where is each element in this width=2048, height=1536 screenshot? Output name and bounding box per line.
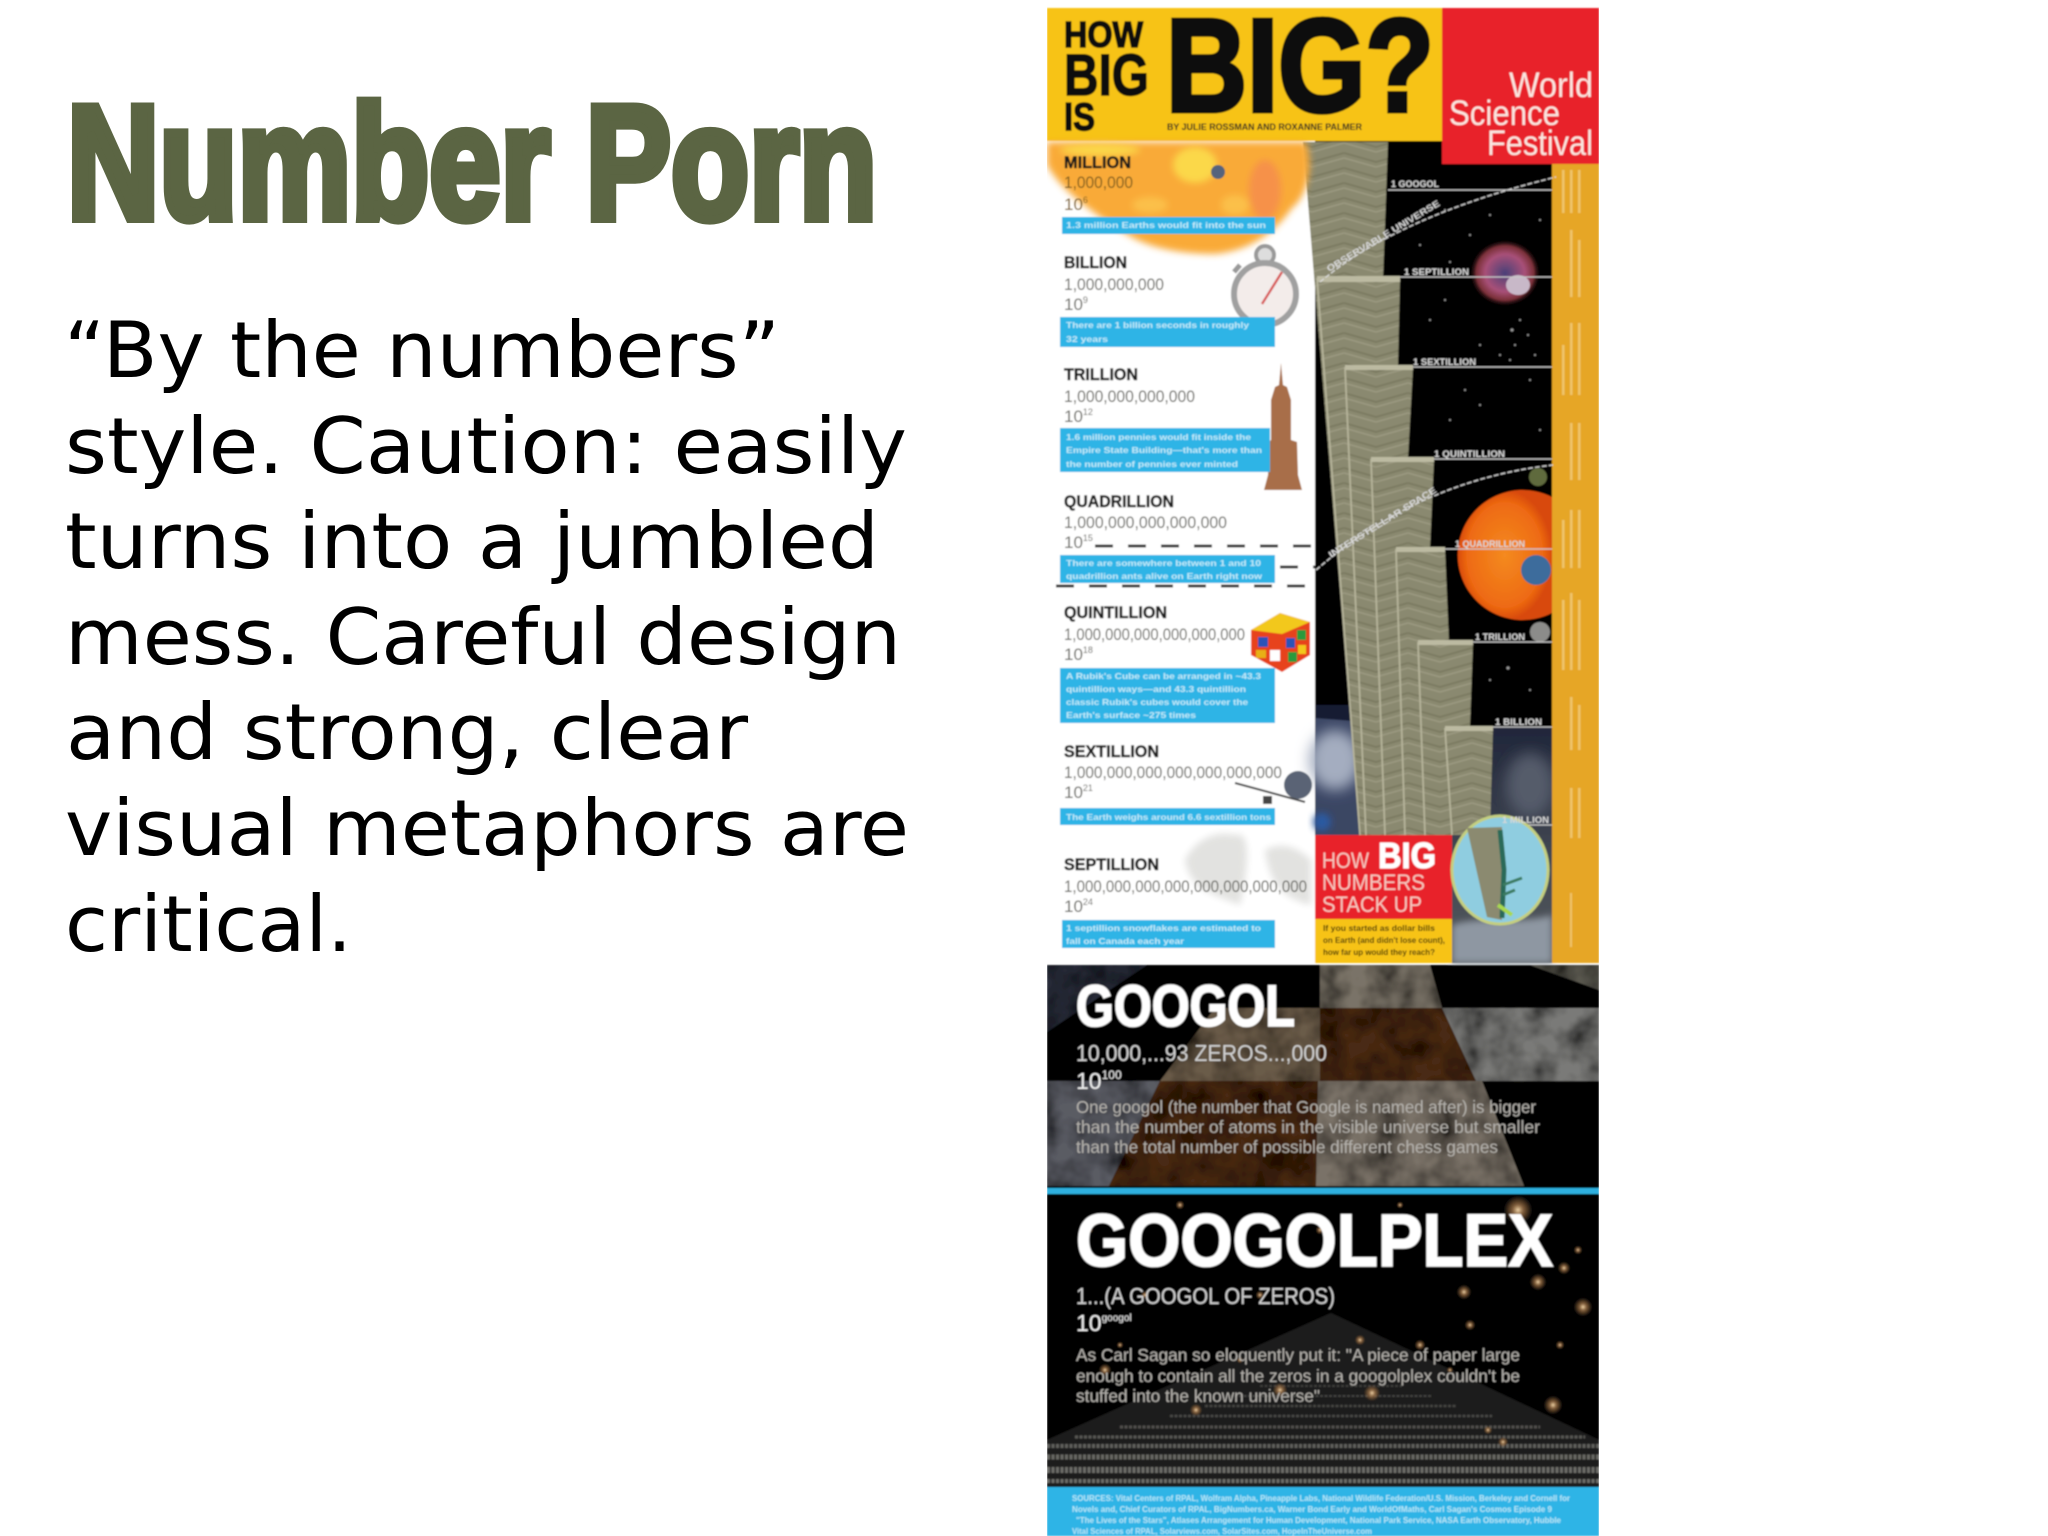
item: billion: 9 (1083, 295, 1088, 305)
world science festival (1449, 66, 1593, 163)
scale labels: 1 GOOGOL (1391, 179, 1439, 189)
earth beside sun (1521, 555, 1551, 585)
item: sextillion: SEXTILLION (1064, 743, 1159, 761)
googol heading: GOOGOL (1076, 974, 1295, 1039)
googolplex description: enough to contain all the zeros in a googolplex couldn't be (1076, 1366, 1520, 1386)
item: quintillion: 10 (1064, 645, 1083, 664)
item: quintillion: QUINTILLION (1064, 604, 1167, 622)
panel: space background (1309, 141, 1554, 963)
body text: and strong, clear (66, 688, 748, 778)
googolplex heading: GOOGOLPLEX (1076, 1199, 1553, 1282)
icon: canada map (1185, 834, 1311, 905)
heading: how big is: IS (1064, 96, 1095, 139)
panel: sources: SOURCES: Vital Centers of RPAL, Wolfram Alpha, Pineapple Labs, National Wildlife Federation/U.S. Mission, Berkeley and Cornell for (1072, 1494, 1570, 1503)
item: quadrillion: 1,000,000,000,000,000 (1064, 513, 1227, 532)
heading text: BIG (1378, 835, 1436, 876)
item: septillion (1062, 856, 1307, 948)
googol exponent: 100 (1102, 1068, 1122, 1082)
icon: earth on seesaw (1235, 771, 1312, 804)
item: sextillion: 10 (1064, 783, 1083, 802)
world science festival: Festival (1487, 124, 1593, 163)
heading: how big is (1064, 14, 1149, 139)
item: trillion: 10 (1064, 407, 1083, 426)
sun (1458, 490, 1552, 620)
nebula (1469, 239, 1541, 307)
googolplex description: stuffed into the known universe" (1076, 1386, 1320, 1406)
panel: googol (1047, 965, 1599, 1190)
byline: BY JULIE ROSSMAN AND ROXANNE PALMER (1167, 122, 1362, 132)
panel: sources (1047, 1487, 1599, 1536)
item: quintillion: Earth's surface ~275 times (1066, 710, 1196, 720)
googolplex description: As Carl Sagan so eloquently put it: "A piece of paper large (1076, 1345, 1520, 1365)
item: quintillion: classic Rubik's cubes would cover the (1066, 697, 1248, 707)
item: septillion: SEPTILLION (1064, 856, 1159, 874)
item: billion: There are 1 billion seconds in roughly (1066, 320, 1249, 330)
chessboard background (1047, 965, 1599, 1186)
item: quintillion: quintillion ways—and 43.3 quintillion (1066, 684, 1246, 694)
yellow caption: how far up would they reach? (1323, 947, 1435, 957)
item: quadrillion: 15 (1083, 533, 1093, 543)
divider band (1047, 1188, 1599, 1194)
panel: left list (1047, 142, 1315, 948)
body text: mess. Careful design (65, 593, 901, 683)
item: million: 1.3 million Earths would fit into the sun (1066, 220, 1266, 230)
item: trillion: TRILLION (1064, 366, 1138, 384)
curve: observable universe (1320, 177, 1556, 282)
panel: sources: Vital Sciences of RPAL, Solarviews.com, SolarSites.com, HopeInTheUniverse.com (1072, 1527, 1372, 1536)
item: trillion (1060, 366, 1270, 472)
icon: ant trails (1056, 546, 1315, 586)
googol exponent: 10 (1076, 1068, 1102, 1094)
scale labels: 1 BILLION (1495, 717, 1542, 727)
item: million: 6 (1083, 195, 1088, 205)
item: quadrillion: quadrillion ants alive on Earth right now (1066, 571, 1262, 581)
yellow caption: on Earth (and didn't lose count), (1323, 935, 1445, 945)
planet (1529, 468, 1547, 486)
item: quintillion: A Rubik's Cube can be arranged in ~43.3 (1066, 671, 1261, 681)
item: septillion: 1,000,000,000,000,000,000,000,000 (1064, 877, 1307, 896)
scale labels: 1 QUINTILLION (1434, 449, 1505, 459)
item: billion: 10 (1064, 295, 1083, 314)
panel: red logo (1442, 8, 1599, 164)
scale labels: 1 TRILLION (1475, 632, 1525, 642)
googol description: than the number of atoms in the visible universe but smaller (1076, 1117, 1540, 1137)
item: sextillion: 21 (1083, 783, 1093, 793)
item: billion: BILLION (1064, 254, 1127, 272)
panel: sources: Novels and, Chief Curators of RPAL, BigNumbers.ca, Warner Bond Early and WorldOfMaths, Carl Sagan's Cosmos Episode 9 (1072, 1505, 1553, 1514)
icon: empire state building (1264, 363, 1302, 490)
item: billion: 1,000,000,000 (1064, 275, 1164, 294)
item: quintillion: 18 (1083, 645, 1093, 655)
googolplex description (1076, 1345, 1520, 1406)
sun illustration (1047, 142, 1310, 254)
icon: statue of liberty inset (1452, 816, 1548, 924)
item: quadrillion: 10 (1064, 533, 1083, 552)
googol description: than the total number of possible different chess games (1076, 1137, 1498, 1157)
panel: how big numbers stack up (1315, 835, 1452, 963)
scale labels: 1 SEPTILLION (1404, 267, 1469, 277)
scale labels (1391, 179, 1542, 727)
heading: how big is: HOW (1064, 14, 1143, 55)
panel: sources: "The Lives of the Stars", Atlases Arrangement for Human Development, National Park Service, NASA Earth Observatory, Hubble (1076, 1516, 1562, 1525)
curve: interstellar space: INTERSTELLAR SPACE (1327, 485, 1438, 560)
world science festival: Science (1449, 94, 1560, 133)
curve: interstellar space (1316, 465, 1553, 570)
item: septillion: fall on Canada each year (1066, 936, 1185, 946)
item: septillion: 10 (1064, 897, 1083, 916)
item: quintillion: 1,000,000,000,000,000,000 (1064, 625, 1245, 644)
pyramid of zeros (1047, 1313, 1599, 1487)
item: quadrillion: There are somewhere between 1 and 10 (1066, 558, 1261, 568)
body text: “By the numbers” (64, 306, 780, 396)
item: trillion: 1,000,000,000,000 (1064, 387, 1195, 406)
stars (1419, 209, 1541, 691)
curve: observable universe: OBSERVABLE UNIVERSE (1325, 198, 1441, 274)
scale lines (1388, 190, 1552, 825)
yellow caption (1323, 923, 1445, 957)
item: sextillion: 1,000,000,000,000,000,000,000 (1064, 763, 1282, 782)
icon: stopwatch (1234, 246, 1296, 325)
panel: gold strip (1552, 164, 1599, 963)
item: trillion: 12 (1083, 407, 1093, 417)
panel: googolplex (1047, 1194, 1599, 1487)
panel: header (1047, 0, 1443, 141)
heading text: NUMBERS (1322, 870, 1425, 895)
moon (1530, 622, 1550, 642)
body text: turns into a jumbled (65, 497, 879, 587)
body text: visual metaphors are (65, 784, 909, 874)
googol description: One googol (the number that Google is named after) is bigger (1076, 1097, 1536, 1117)
scale labels: 1 QUADRILLION (1455, 539, 1525, 549)
body text: style. Caution: easily (65, 402, 907, 492)
item: million: MILLION (1064, 154, 1131, 172)
googolplex number: 1...(A GOOGOL OF ZEROS) (1076, 1283, 1335, 1309)
heading text (1322, 835, 1436, 917)
item: quadrillion (1060, 493, 1275, 583)
yellow caption: If you started as dollar bills (1323, 923, 1435, 933)
galaxies (1087, 1196, 1592, 1447)
heading: how big is: BIG (1064, 43, 1149, 108)
icon: rubik's cube (1251, 613, 1310, 672)
item: septillion: 1 septillion snowflakes are estimated to (1066, 923, 1261, 933)
infographic poster (1047, 0, 1599, 1536)
googolplex exponent: 10 (1076, 1310, 1102, 1336)
item: sextillion (1060, 743, 1282, 825)
title: Number Porn (67, 72, 877, 254)
world science festival: World (1509, 66, 1593, 105)
item: quintillion (1060, 604, 1275, 723)
item: trillion: Empire State Building—that's more than (1066, 445, 1262, 455)
body text: critical. (65, 880, 352, 970)
tower of money (1303, 142, 1493, 835)
item: sextillion: The Earth weighs around 6.6 sextillion tons (1066, 812, 1271, 822)
item: billion: 32 years (1066, 334, 1108, 344)
scale labels: 1 SEXTILLION (1413, 357, 1476, 367)
earth imagery (1309, 705, 1554, 963)
heading text: STACK UP (1322, 892, 1422, 917)
googol number: 10,000,...93 ZEROS...,000 (1076, 1040, 1327, 1066)
label: 1 million: 1 MILLION (1502, 815, 1549, 825)
googolplex exponent: googol (1102, 1313, 1132, 1324)
body text (64, 306, 909, 970)
item: million (1062, 154, 1275, 234)
item: million: 10 (1064, 195, 1083, 214)
googol description (1076, 1097, 1540, 1157)
item: septillion: 24 (1083, 897, 1093, 907)
item: billion (1060, 254, 1275, 347)
item: million: 1,000,000 (1064, 173, 1133, 192)
heading text: HOW (1322, 848, 1369, 873)
item: quadrillion: QUADRILLION (1064, 493, 1174, 511)
item: trillion: 1.6 million pennies would fit inside the (1066, 432, 1251, 442)
item: trillion: the number of pennies ever minted (1066, 459, 1238, 469)
